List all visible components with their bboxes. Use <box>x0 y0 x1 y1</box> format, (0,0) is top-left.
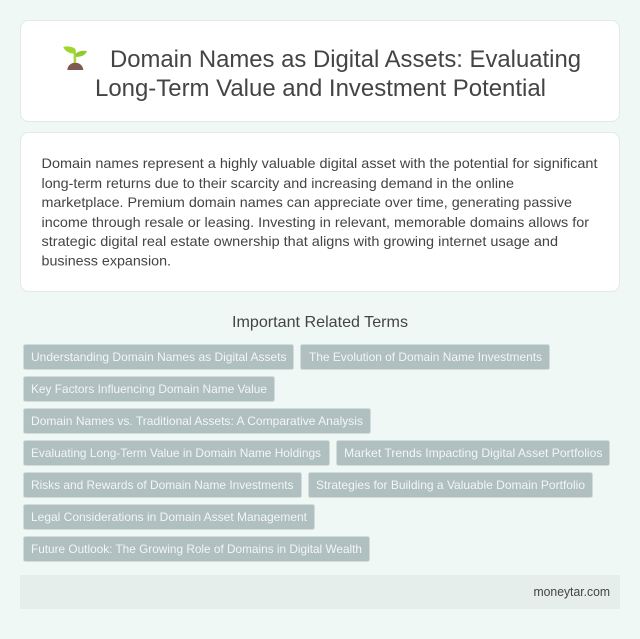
text block: description: long-term returns due to their scarcity and increasing demand in the online <box>42 175 514 191</box>
tag: Risks and Rewards of Domain Name Investments <box>31 478 294 492</box>
tag <box>336 440 610 466</box>
tag: Understanding Domain Names as Digital Assets <box>31 350 286 364</box>
title: Domain Names as Digital Assets: Evaluating <box>110 46 581 73</box>
tag: Strategies for Building a Valuable Domain Portfolio <box>316 478 585 492</box>
title: Long-Term Value and Investment Potential <box>95 75 546 102</box>
tag: Market Trends Impacting Digital Asset Portfolios <box>344 446 602 460</box>
panel: description card <box>20 132 620 292</box>
tag: Evaluating Long-Term Value in Domain Name Holdings <box>31 446 321 460</box>
tag <box>24 536 370 562</box>
text block: description: strategic digital real estate ownership that aligns with growing internet usage and <box>42 233 558 249</box>
tag <box>24 408 370 434</box>
text block: description: marketplace. Premium domain names can appreciate over time, generating passive <box>42 194 572 210</box>
title <box>95 46 581 102</box>
tag: Legal Considerations in Domain Asset Management <box>31 510 308 524</box>
tag <box>24 440 330 466</box>
text block: description <box>42 155 598 268</box>
tag <box>308 472 592 498</box>
tag <box>24 472 302 498</box>
tag <box>300 344 550 370</box>
text block: description: business expansion. <box>42 252 171 268</box>
footer site name: moneytar.com <box>534 584 610 599</box>
footer <box>20 575 620 609</box>
heading: related terms: Important Related Terms <box>232 314 408 331</box>
tag: Key Factors Influencing Domain Name Value <box>31 382 267 396</box>
tag <box>24 376 274 402</box>
text block: description: Domain names represent a highly valuable digital asset with the potential for significant <box>42 155 598 171</box>
tag: Domain Names vs. Traditional Assets: A Comparative Analysis <box>31 414 363 428</box>
text block: description: income through resale or leasing. Investing in relevant, memorable domains allows for <box>42 214 589 230</box>
panel: title card <box>20 20 620 122</box>
tag <box>24 344 294 370</box>
tag: Future Outlook: The Growing Role of Domains in Digital Wealth <box>31 542 362 556</box>
tag <box>24 504 314 530</box>
tag: The Evolution of Domain Name Investments <box>309 350 542 364</box>
icon: sprout <box>63 46 87 70</box>
panel: related term tags <box>24 344 610 562</box>
